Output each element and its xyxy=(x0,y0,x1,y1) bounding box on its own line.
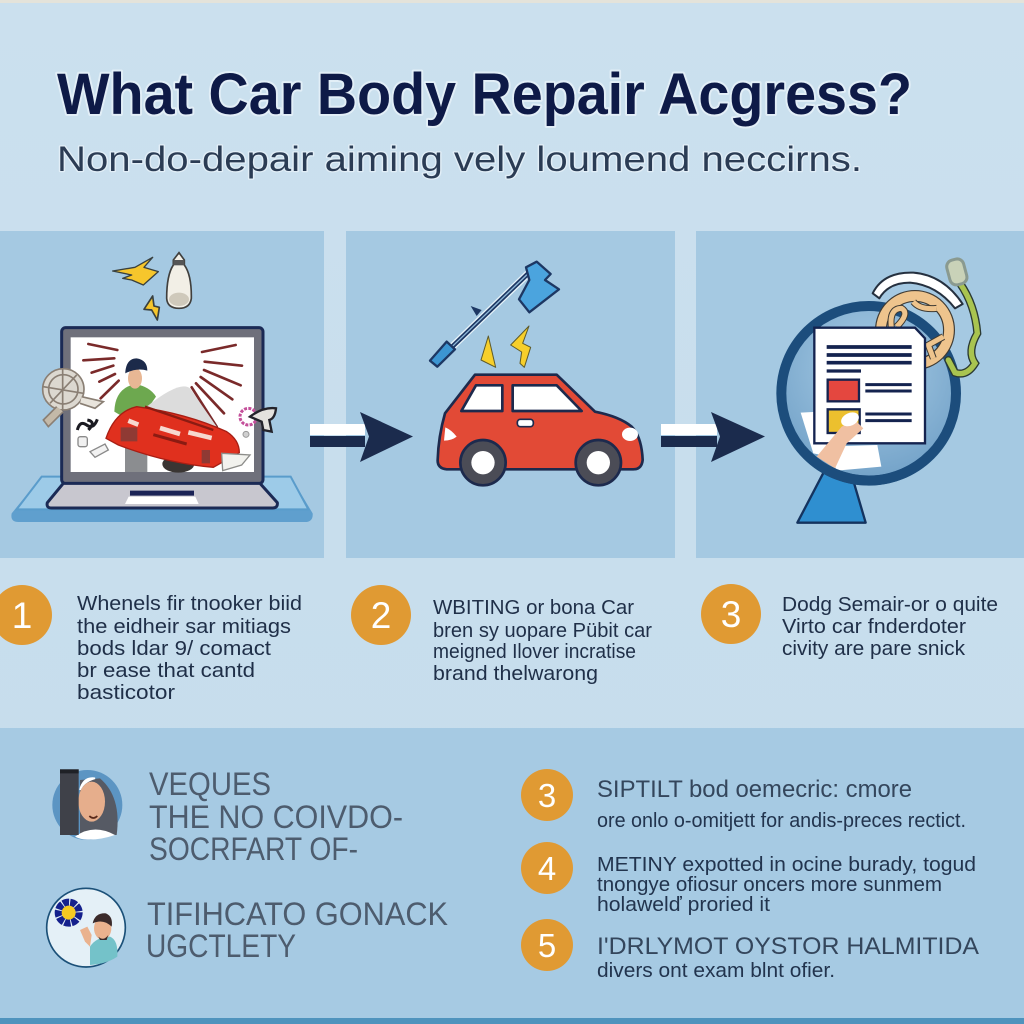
icon: elder avatar xyxy=(52,769,122,840)
icon: white arc xyxy=(873,273,963,308)
heading: left group 1: THE NO COIVDO- xyxy=(149,799,403,835)
icon: pink gear and clamp xyxy=(240,408,276,437)
number badge 3 xyxy=(701,584,761,644)
item 5 text: I'DRLYMOT OYSTOR HALMITIDA xyxy=(597,933,979,960)
panel: bottom section xyxy=(0,728,1024,1024)
number badge 1 xyxy=(0,585,52,645)
heading: left group 1 xyxy=(149,766,403,867)
icon: ring front arc xyxy=(807,455,931,480)
icon: laptop xyxy=(47,328,277,508)
number badge 4: 4 xyxy=(538,850,556,887)
item 5 text: divers ont exam blnt ofier. xyxy=(597,960,835,982)
heading: left group 2 xyxy=(146,896,448,964)
icon: light bulb xyxy=(167,253,191,308)
icon: green cable xyxy=(945,257,977,374)
number badge 3: 3 xyxy=(538,777,556,814)
icon: hammer tool xyxy=(430,262,559,367)
icon: back papers xyxy=(801,412,881,471)
icon: damaged red car xyxy=(106,386,250,473)
icon: fan wheel xyxy=(43,369,103,427)
step 1 text xyxy=(77,592,302,704)
item 3 text xyxy=(597,776,966,832)
title: What Car Body Repair Acgress? xyxy=(57,62,912,127)
icon: yellow sparks xyxy=(481,326,531,367)
heading: left group 2: UGCTLETY xyxy=(146,928,296,964)
icon: document xyxy=(814,328,925,443)
step 2 text xyxy=(433,596,652,685)
icon: laptop platform xyxy=(11,477,313,522)
item 3 text: SIPTILT bod oemecric: cmore xyxy=(597,776,912,803)
icon: magnifier ring xyxy=(781,306,956,481)
heading: left group 2: TIFIHCATO GONACK xyxy=(147,896,448,932)
icon: chain links and debris xyxy=(77,419,108,457)
step 3 xyxy=(701,584,998,660)
step 1 text: basticotor xyxy=(77,681,175,704)
number badge 3 xyxy=(521,769,573,821)
icon: impact rays xyxy=(83,344,242,427)
step 2 text: meigned Ilover incratise xyxy=(433,640,636,663)
icon: hand pointing xyxy=(817,410,863,468)
number badge 5: 5 xyxy=(538,927,556,964)
item 5 xyxy=(521,919,979,982)
icon: yellow spark shape xyxy=(113,257,158,285)
icon: lightning bolt xyxy=(144,296,159,320)
step 1 text: bods ldar 9/ comact xyxy=(77,637,271,660)
step 2 text: WBITING or bona Car xyxy=(433,596,634,619)
step 2 text: brand thelwarong xyxy=(433,662,598,685)
item 3 xyxy=(521,769,966,832)
item 4 text: METINY expotted in ocine burady, togud xyxy=(597,854,976,876)
number badge 2: 2 xyxy=(371,595,391,636)
step 2 text: bren sy uopare Pübit car xyxy=(433,619,652,642)
step 3 text: Dodg Semair-or o quite xyxy=(782,593,998,616)
item 4 xyxy=(521,842,976,916)
step 1 text: the eidheir sar mitiags xyxy=(77,615,291,638)
item 4 text xyxy=(597,854,976,916)
subtitle: Non-do-depair aiming vely loumend neccirns. xyxy=(57,140,862,179)
item 5 text xyxy=(597,933,979,982)
number badge 5 xyxy=(521,919,573,971)
arrow: step 2 to step 3 xyxy=(661,412,765,462)
number badge 3: 3 xyxy=(721,594,741,635)
icon: person with flower avatar xyxy=(47,888,125,967)
step 1 xyxy=(0,585,302,704)
number badge 4 xyxy=(521,842,573,894)
arrow: step 1 to step 2 xyxy=(310,412,413,462)
number badge 2 xyxy=(351,585,411,645)
step 3 text: civity are pare snick xyxy=(782,637,966,660)
panel: step 1 laptop illustration xyxy=(0,231,324,558)
panel: step 3 document illustration xyxy=(696,231,1024,558)
heading: left group 1: SOCRFART OF- xyxy=(149,831,358,867)
step 1 text: br ease that cantd xyxy=(77,659,255,682)
number badge 1: 1 xyxy=(12,595,32,636)
step 2 xyxy=(351,585,652,685)
item 3 text: ore onlo o-omitjett for andis-preces rectict. xyxy=(597,810,966,832)
item 4 text: tnongye ofiosur oncers more sunmem xyxy=(597,874,942,896)
panel: step 2 car illustration xyxy=(346,231,675,558)
step 1 text: Whenels fir tnooker biid xyxy=(77,592,302,615)
item 4 text: holawelď proried it xyxy=(597,894,770,916)
step 3 text: Virto car fnderdoter xyxy=(782,615,966,638)
step 3 text xyxy=(782,593,998,660)
icon: person xyxy=(114,358,156,472)
icon: stand xyxy=(797,472,866,523)
icon: red car xyxy=(438,375,643,485)
heading: left group 1: VEQUES xyxy=(149,766,271,802)
icon: tan wheel xyxy=(881,296,949,364)
